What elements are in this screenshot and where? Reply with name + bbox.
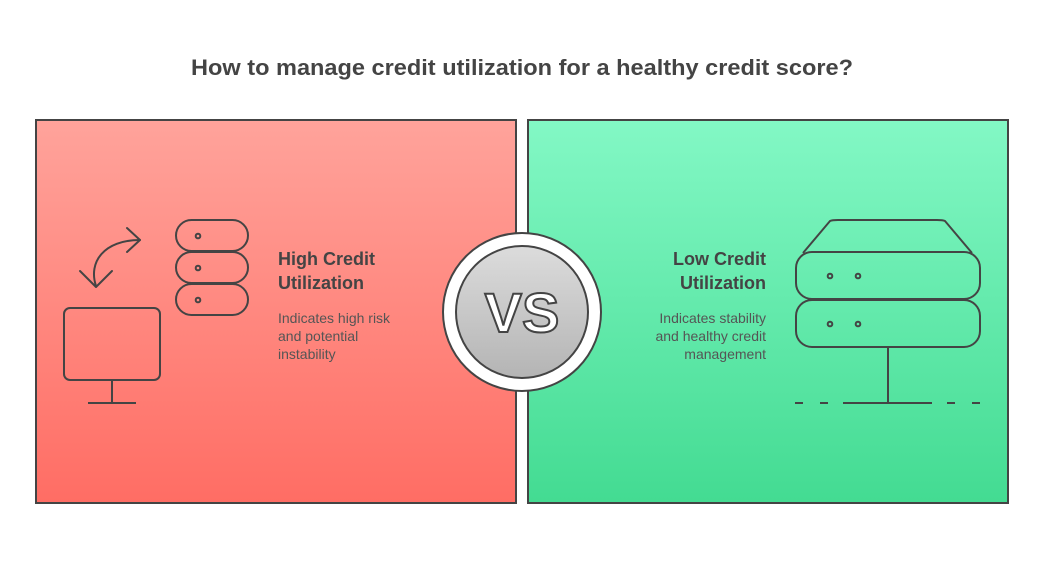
title: How to manage credit utilization for a healthy credit score? <box>191 55 853 80</box>
text: high description: instability <box>278 346 336 362</box>
icon: server stack <box>176 220 248 315</box>
heading: low credit: Utilization <box>680 273 766 293</box>
vs badge <box>443 233 601 391</box>
icon: server <box>795 220 980 403</box>
vs badge: VS <box>485 281 559 344</box>
panel: high credit utilization <box>36 120 516 503</box>
heading: high credit: Utilization <box>278 273 364 293</box>
icon: swap arrow <box>80 228 140 287</box>
text: high description: and potential <box>278 328 358 344</box>
text: low description: management <box>684 346 766 362</box>
text: low description: and healthy credit <box>655 328 766 344</box>
text: high description: Indicates high risk <box>278 310 390 326</box>
text: low description: Indicates stability <box>659 310 766 326</box>
icon: monitor <box>64 308 160 403</box>
heading: low credit: Low Credit <box>673 249 766 269</box>
panel: low credit utilization <box>528 120 1008 503</box>
heading: high credit: High Credit <box>278 249 375 269</box>
